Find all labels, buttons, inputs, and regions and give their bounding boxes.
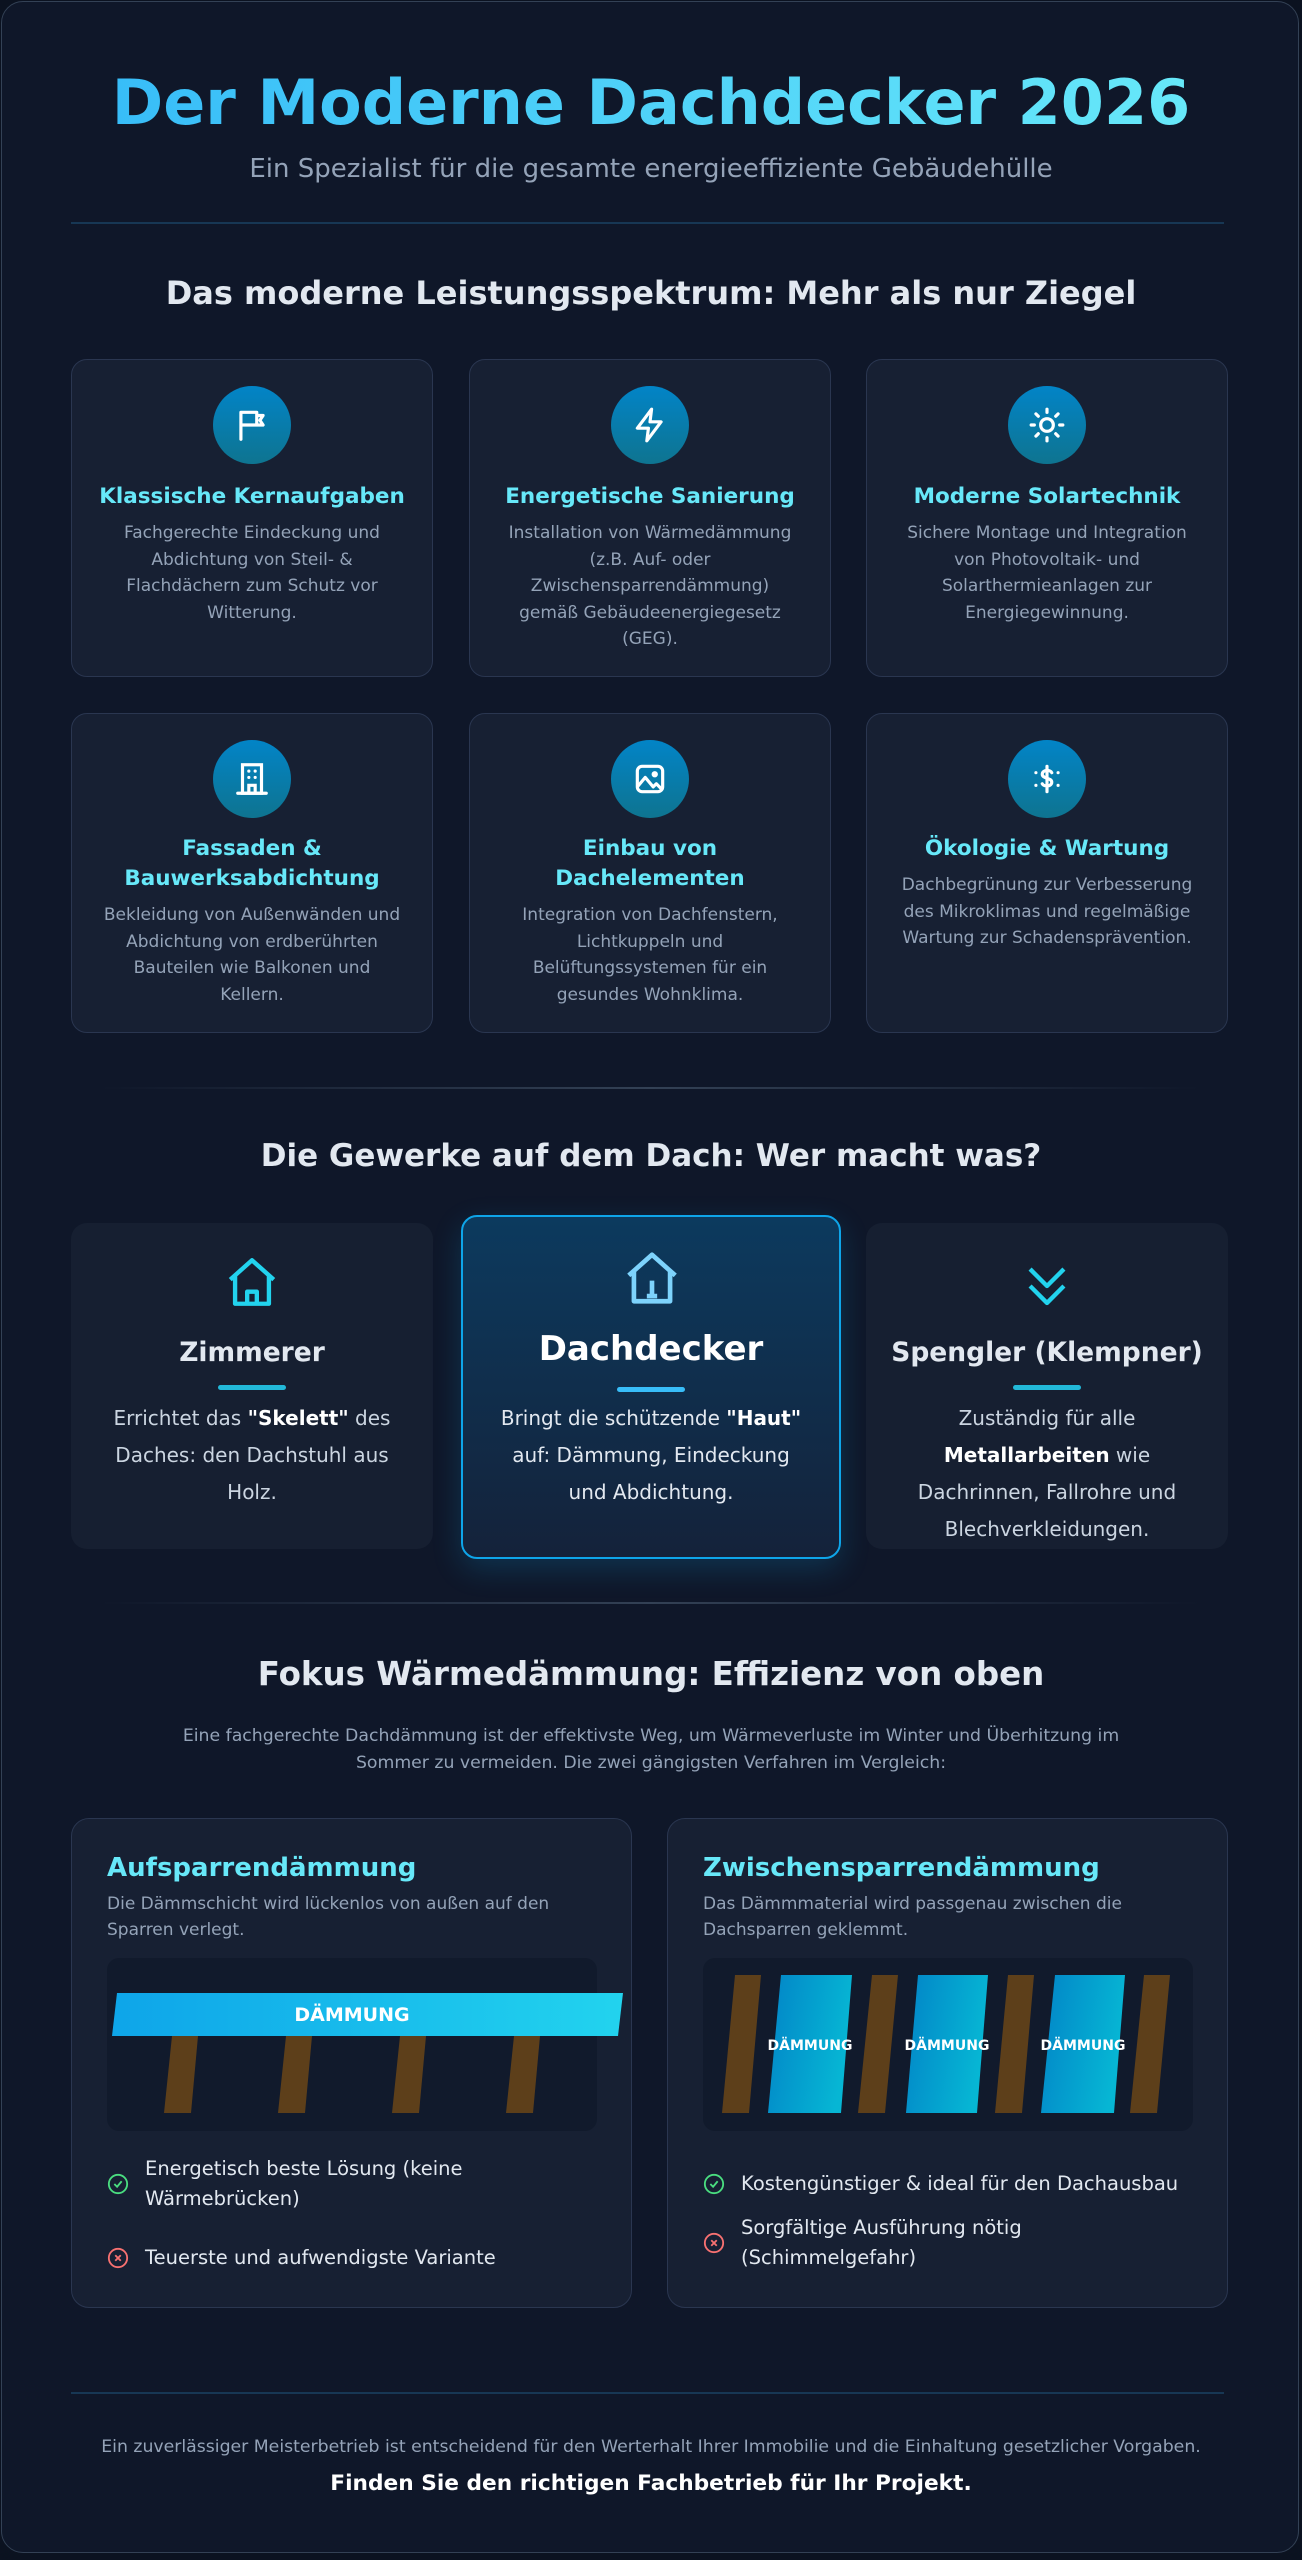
card: Klassische Kernaufgaben [71,359,433,677]
card: Solartechnik [866,359,1228,677]
intro text: Eine fachgerechte Dachdämmung ist der effektivste Weg, um Wärmeverluste im Winter und Überhitzung im Sommer zu vermeiden. Die zwei gängigsten Verfahren im Vergleich: [183,1726,1119,1773]
card title: Ökologie & Wartung [925,836,1169,861]
icon: house [627,1252,677,1304]
card text: Sichere Montage und Integration von Photovoltaik- und Solarthermieanlagen zur Energiegewinnung. [907,523,1187,622]
footer text: Ein zuverlässiger Meisterbetrieb ist entscheidend für den Werterhalt Ihrer Immobilie und die Einhaltung gesetzlicher Vorgaben. [101,2437,1201,2457]
card: Energetische Sanierung [469,359,831,677]
panel: Zwischensparrendämmung [667,1818,1228,2308]
diagram: Zwischensparren: DÄMMUNG [905,2037,989,2054]
card: Fassaden [71,713,433,1033]
trade title: Dachdecker [539,1329,763,1369]
title: Der Moderne Dachdecker 2026 [112,66,1190,139]
card title: Dachelementen [555,866,745,891]
icon: flag [213,386,291,464]
con item: Sorgfältige Ausführung nötig (Schimmelgefahr) [741,2216,1022,2269]
diagram: Aufsparren: DÄMMUNG [294,2002,410,2026]
trade text: Bringt die schützende "Haut" auf: Dämmung, Eindeckung und Abdichtung. [501,1406,801,1504]
trade text: Errichtet das "Skelett" des Daches: den Dachstuhl aus Holz. [114,1406,390,1504]
heading: Wärmedämmung: Fokus Wärmedämmung: Effizienz von oben [258,1655,1044,1693]
card title [555,836,745,891]
icon: sprout [1008,740,1086,818]
card text: Integration von Dachfenstern, Lichtkuppeln und Belüftungssystemen für ein gesundes Wohnklima. [522,905,778,1004]
icon: house [228,1258,276,1306]
trade card: Dachdecker (highlight) [461,1215,841,1559]
panel text: Das Dämmmaterial wird passgenau zwischen die Dachsparren geklemmt. [703,1894,1122,1940]
trade card: Zimmerer [71,1223,433,1549]
con item: Teuerste und aufwendigste Variante [145,2246,496,2269]
footer call to action: Finden Sie den richtigen Fachbetrieb für Ihr Projekt. [330,2471,972,2496]
heading: Gewerke: Die Gewerke auf dem Dach: Wer macht was? [261,1138,1041,1174]
card title: Fassaden & [182,836,322,861]
subtitle: Ein Spezialist für die gesamte energieeffiziente Gebäudehülle [249,154,1053,184]
icon: sun [1008,386,1086,464]
panel: Aufsparrendämmung [71,1818,632,2308]
icon: chevrons [1028,1268,1066,1306]
trade title: Zimmerer [179,1337,325,1368]
panel title: Aufsparrendämmung [107,1853,416,1883]
diagram: Zwischensparren: DÄMMUNG [1041,2037,1125,2054]
card text: Bekleidung von Außenwänden und Abdichtung von erdberührten Bauteilen wie Balkonen und Kellern. [104,905,400,1004]
diagram: Aufsparren [112,1993,623,2113]
card: Dachelemente [469,713,831,1033]
trade card: Spengler [866,1223,1228,1549]
panel title: Zwischensparrendämmung [703,1853,1100,1883]
card text: Dachbegrünung zur Verbesserung des Mikroklimas und regelmäßige Wartung zur Schadensprävention. [902,875,1192,948]
card title: Moderne Solartechnik [914,484,1180,509]
card title: Klassische Kernaufgaben [99,484,405,509]
icon: building [213,740,291,818]
diagram: Zwischensparren [722,1975,1170,2113]
icon: bolt [611,386,689,464]
trade title: Spengler (Klempner) [891,1337,1203,1368]
trade text: Zuständig für alle Metallarbeiten wie Dachrinnen, Fallrohre und Blechverkleidungen. [918,1406,1176,1541]
icon: image [611,740,689,818]
pro item: Energetisch beste Lösung (keine Wärmebrücken) [145,2157,462,2210]
card title: Bauwerksabdichtung [124,866,380,891]
panel text: Die Dämmschicht wird lückenlos von außen auf den Sparren verlegt. [107,1894,549,1940]
heading: Leistungsspektrum: Das moderne Leistungsspektrum: Mehr als nur Ziegel [166,274,1136,312]
card text: Fachgerechte Eindeckung und Abdichtung von Steil- & Flachdächern zum Schutz vor Witterung. [124,523,380,622]
card text: Installation von Wärmedämmung (z.B. Auf- oder Zwischensparrendämmung) gemäß Gebäudeenergiegesetz (GEG). [509,523,791,649]
card: Ökologie [866,713,1228,1033]
card title: Energetische Sanierung [505,484,795,509]
card title [124,836,380,891]
pro item: Kostengünstiger & ideal für den Dachausbau [741,2172,1178,2195]
card title: Einbau von [583,836,717,861]
diagram: Zwischensparren: DÄMMUNG [768,2037,852,2054]
